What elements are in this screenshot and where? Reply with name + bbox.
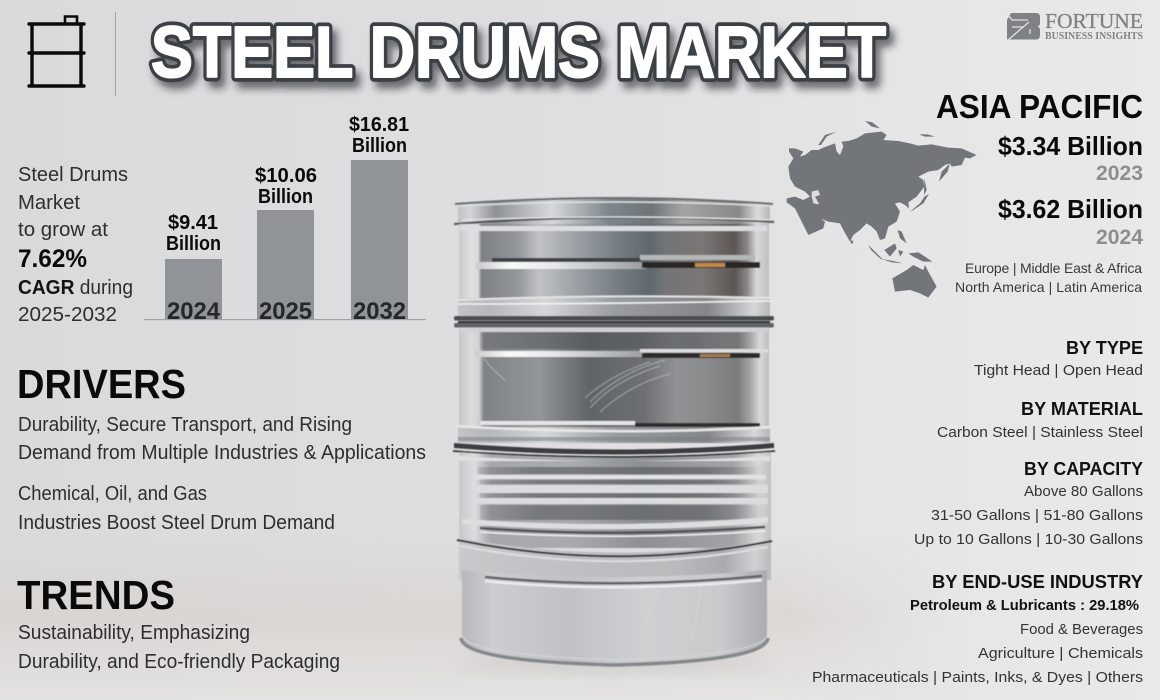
map: Asia Pacific: [787, 121, 977, 298]
heading: drivers: DRIVERS: [17, 361, 186, 407]
other regions: [955, 260, 1142, 295]
value 2024: 2024: [1096, 226, 1143, 249]
panel: by end-use industry: [812, 572, 1143, 686]
Philippines: [898, 230, 907, 243]
value 2023: $3.34 Billion: [998, 131, 1143, 161]
text: trend: [18, 622, 340, 673]
bar 2024: [165, 212, 222, 325]
heading: by material: BY MATERIAL: [1021, 399, 1143, 419]
image: stacked steel drum: [453, 198, 775, 665]
heading: by type: BY TYPE: [1066, 338, 1143, 358]
text: driver 1: Durability, Secure Transport, and Rising: [18, 414, 352, 436]
heading: Asia Pacific: ASIA PACIFIC: [936, 88, 1143, 125]
bar 2024: 2024: [167, 298, 221, 325]
text: material segments: Carbon Steel | Stainless Steel: [937, 424, 1143, 441]
bar 2032: 2032: [353, 298, 406, 325]
icon: steel drum: [29, 16, 84, 86]
bar 2025: Billion: [258, 186, 313, 208]
text: type segments: Tight Head | Open Head: [974, 362, 1143, 379]
text: CAGR summary: to grow at: [18, 219, 108, 241]
text: driver 1: [18, 414, 426, 464]
title: STEEL DRUMS MARKET: [151, 13, 886, 93]
drum lower section: [453, 450, 775, 548]
bar chart: market size: [144, 114, 426, 325]
brushed metal reflections: [484, 358, 700, 640]
Sumatra: [868, 245, 883, 260]
Java: [882, 259, 903, 263]
drum middle section: [459, 328, 769, 428]
chart axis: [144, 319, 426, 320]
logo: Fortune Business Insights: [1007, 9, 1143, 42]
Japan: [910, 194, 929, 212]
heading: by capacity: BY CAPACITY: [1024, 459, 1143, 479]
text: CAGR summary: CAGR during: [18, 277, 133, 299]
bar 2025: 2025: [259, 298, 312, 325]
icon: FB emblem: [1007, 13, 1040, 40]
bar 2024: Billion: [166, 233, 221, 255]
text: driver 2: Industries Boost Steel Drum Demand: [18, 512, 335, 534]
Sulawesi: [898, 250, 903, 257]
panel: by type: [974, 338, 1143, 379]
text: other segments: [812, 621, 1143, 686]
text: CAGR summary: [18, 164, 133, 326]
text: CAGR summary: 7.62%: [18, 245, 87, 273]
Kamchatka: [939, 163, 950, 182]
drum ring band 2: [454, 426, 774, 454]
panel: by capacity: [914, 459, 1143, 548]
text: driver 1: Demand from Multiple Industries & Applications: [18, 442, 426, 464]
Arctic islands: [818, 132, 837, 145]
other regions: Europe | Middle East & Africa: [965, 260, 1142, 276]
text: driver 2: Chemical, Oil, and Gas: [18, 483, 207, 505]
Sakhalin: [924, 178, 927, 195]
text: capacity segments: Up to 10 Gallons | 10-30 Gallons: [914, 531, 1143, 548]
Australia: [892, 265, 937, 298]
heading: by end-use industry: BY END-USE INDUSTRY: [932, 572, 1143, 592]
header divider: [115, 12, 116, 96]
drum upper section: [459, 224, 769, 300]
drum base: [461, 570, 768, 665]
value 2023: 2023: [1096, 162, 1143, 185]
drum ring band 1: [454, 296, 774, 328]
text: other segments: Pharmaceuticals | Paints, Inks, & Dyes | Others: [812, 669, 1143, 686]
Sri Lanka: [851, 240, 853, 244]
bar 2032: [349, 114, 409, 325]
text: CAGR summary: 2025-2032: [18, 304, 117, 326]
panel: trends: [17, 572, 340, 673]
logo tagline: BUSINESS INSIGHTS: [1045, 31, 1143, 42]
heading: trends: TRENDS: [17, 572, 175, 618]
other regions: North America | Latin America: [955, 279, 1142, 295]
text: leading segment: Petroleum & Lubricants : 29.18%: [910, 598, 1139, 614]
text: capacity segments: 31-50 Gallons | 51-80 Gallons: [931, 507, 1143, 524]
text: other segments: Food & Beverages: [1020, 621, 1143, 638]
text: other segments: Agriculture | Chemicals: [978, 645, 1143, 662]
text: capacity segments: Above 80 Gallons: [1024, 483, 1143, 500]
text: trend: Sustainability, Emphasizing: [18, 622, 250, 644]
text: driver 2: [18, 483, 335, 534]
Caspian Sea: [812, 190, 820, 204]
bar 2032: $16.81: [349, 114, 409, 136]
New Guinea: [908, 252, 932, 262]
text: CAGR summary: Steel Drums: [18, 164, 128, 186]
drum lower ring: [457, 538, 772, 580]
bar 2024: $9.41: [168, 212, 218, 234]
bar 2025: $10.06: [255, 165, 317, 187]
value 2024: [998, 194, 1143, 249]
text: capacity segments: [914, 483, 1143, 548]
value 2023: [998, 131, 1143, 185]
mainland Asia: [787, 132, 977, 242]
panel: by material: [937, 399, 1143, 441]
bar 2032: Billion: [352, 135, 407, 157]
drum top ring: [454, 198, 774, 224]
Borneo: [884, 243, 897, 257]
bar 2025: [255, 165, 317, 325]
text: CAGR summary: Market: [18, 192, 80, 214]
text: trend: Durability, and Eco-friendly Packaging: [18, 651, 340, 673]
drum shadow: [455, 659, 775, 669]
title: STEEL DRUMS MARKET: [151, 13, 886, 93]
panel: drivers: [17, 361, 426, 534]
logo wordmark: FORTUNE: [1045, 9, 1143, 33]
panel: Asia Pacific figures: [936, 88, 1143, 295]
value 2024: $3.62 Billion: [998, 194, 1143, 224]
